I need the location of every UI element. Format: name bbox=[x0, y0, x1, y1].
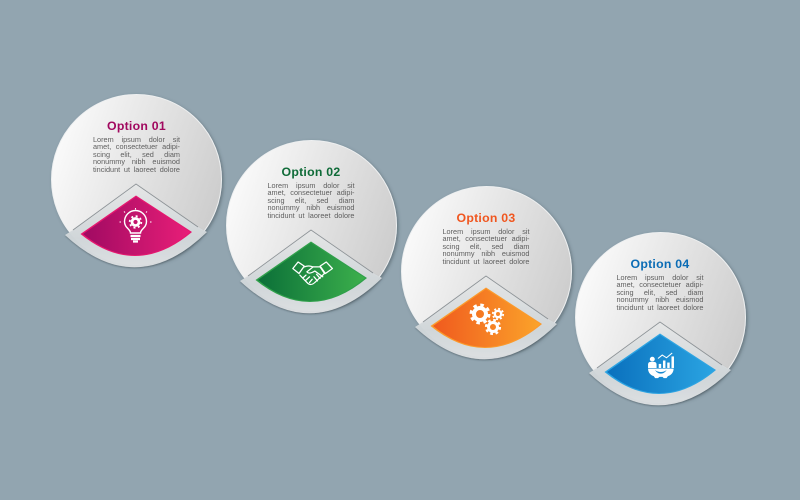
body text: amet, consectetuer adipi- bbox=[442, 234, 530, 243]
body text bbox=[93, 134, 180, 174]
body text: scing elit, sed diam bbox=[93, 150, 180, 159]
graphic: circle, sector and chart gear icon bbox=[575, 232, 749, 408]
body text: Lorem ipsum dolor sit bbox=[268, 180, 354, 190]
card: option 01 bbox=[51, 94, 225, 270]
card: option 02 bbox=[226, 140, 400, 316]
card: option 03 bbox=[401, 186, 575, 361]
body text: Lorem ipsum dolor sit bbox=[616, 272, 704, 282]
body text: nonummy nibh euismod bbox=[268, 203, 354, 212]
body text: nonummy nibh euismod bbox=[442, 249, 530, 258]
body text: scing elit, sed diam bbox=[616, 288, 704, 297]
icon: person, bars and gear bbox=[648, 353, 673, 378]
body text: amet, consectetuer adipi- bbox=[93, 142, 180, 151]
body text bbox=[268, 180, 354, 220]
title: Option 02 bbox=[282, 165, 340, 179]
body text: amet, consectetuer adipi- bbox=[268, 188, 354, 197]
body text: Lorem ipsum dolor sit bbox=[93, 134, 180, 144]
body text: scing elit, sed diam bbox=[268, 196, 354, 205]
graphic: circle, sector and bulb icon bbox=[51, 94, 225, 270]
icon: gears bbox=[470, 305, 503, 334]
body text: Lorem ipsum dolor sit bbox=[442, 226, 530, 236]
graphic: circle, sector and handshake icon bbox=[226, 140, 400, 316]
title: Option 04 bbox=[631, 257, 689, 271]
body text: nonummy nibh euismod bbox=[93, 157, 180, 166]
body text: amet, consectetuer adipi- bbox=[616, 280, 704, 289]
body text: scing elit, sed diam bbox=[442, 242, 530, 251]
body text: tincidunt ut laoreet dolore bbox=[268, 211, 354, 220]
graphic: circle, sector and gears icon bbox=[401, 186, 575, 361]
icon: light bulb with gear bbox=[120, 208, 152, 242]
body text: tincidunt ut laoreet dolore bbox=[616, 303, 704, 312]
title: Option 01 bbox=[107, 119, 166, 133]
title: Option 03 bbox=[457, 211, 515, 225]
body text: tincidunt ut laoreet dolore bbox=[442, 257, 530, 266]
body text: nonummy nibh euismod bbox=[616, 295, 704, 304]
card: option 04 bbox=[575, 232, 749, 408]
body text: tincidunt ut laoreet dolore bbox=[93, 165, 180, 174]
icon: handshake bbox=[292, 262, 332, 284]
body text bbox=[616, 272, 704, 312]
body text bbox=[442, 226, 530, 266]
